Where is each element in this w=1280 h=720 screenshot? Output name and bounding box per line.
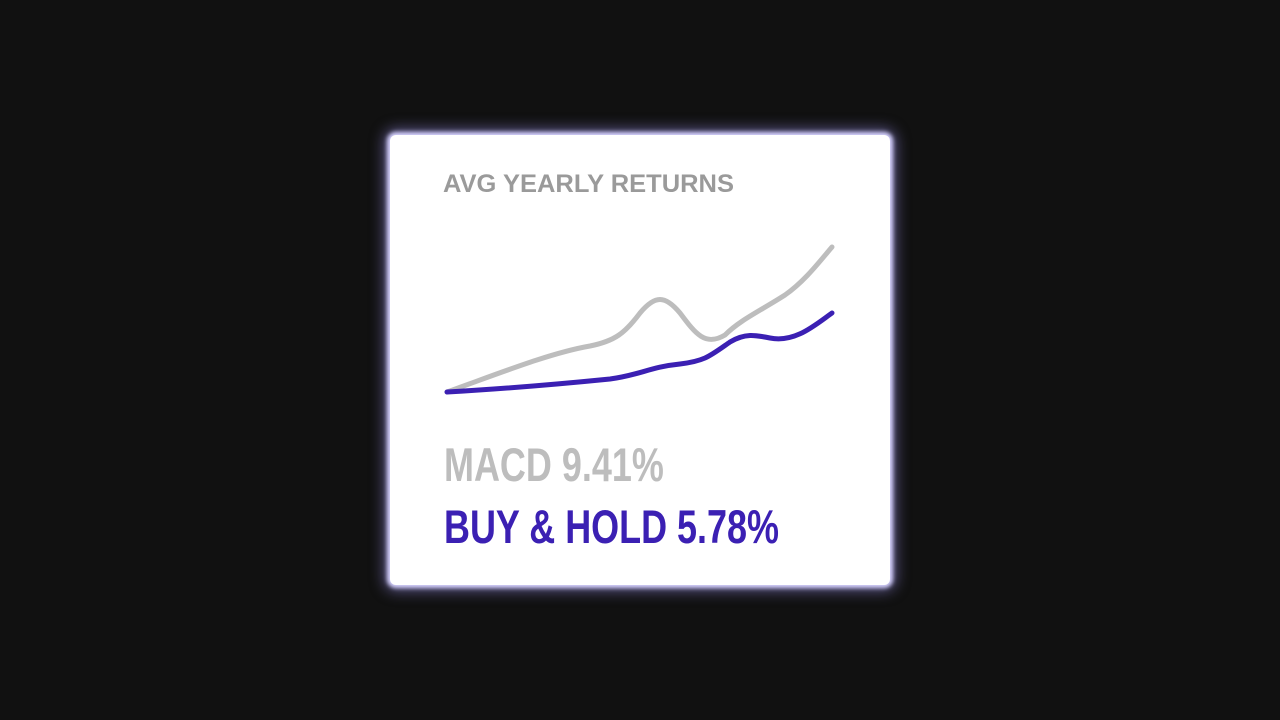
line chart [444,244,834,394]
text: buy & hold return: BUY & HOLD 5.78% [444,500,779,553]
panel: returns card [390,135,890,585]
line: MACD [447,247,832,392]
text: MACD return: MACD 9.41% [444,438,664,491]
title: AVG YEARLY RETURNS [443,170,734,198]
line: buy and hold [447,313,832,392]
